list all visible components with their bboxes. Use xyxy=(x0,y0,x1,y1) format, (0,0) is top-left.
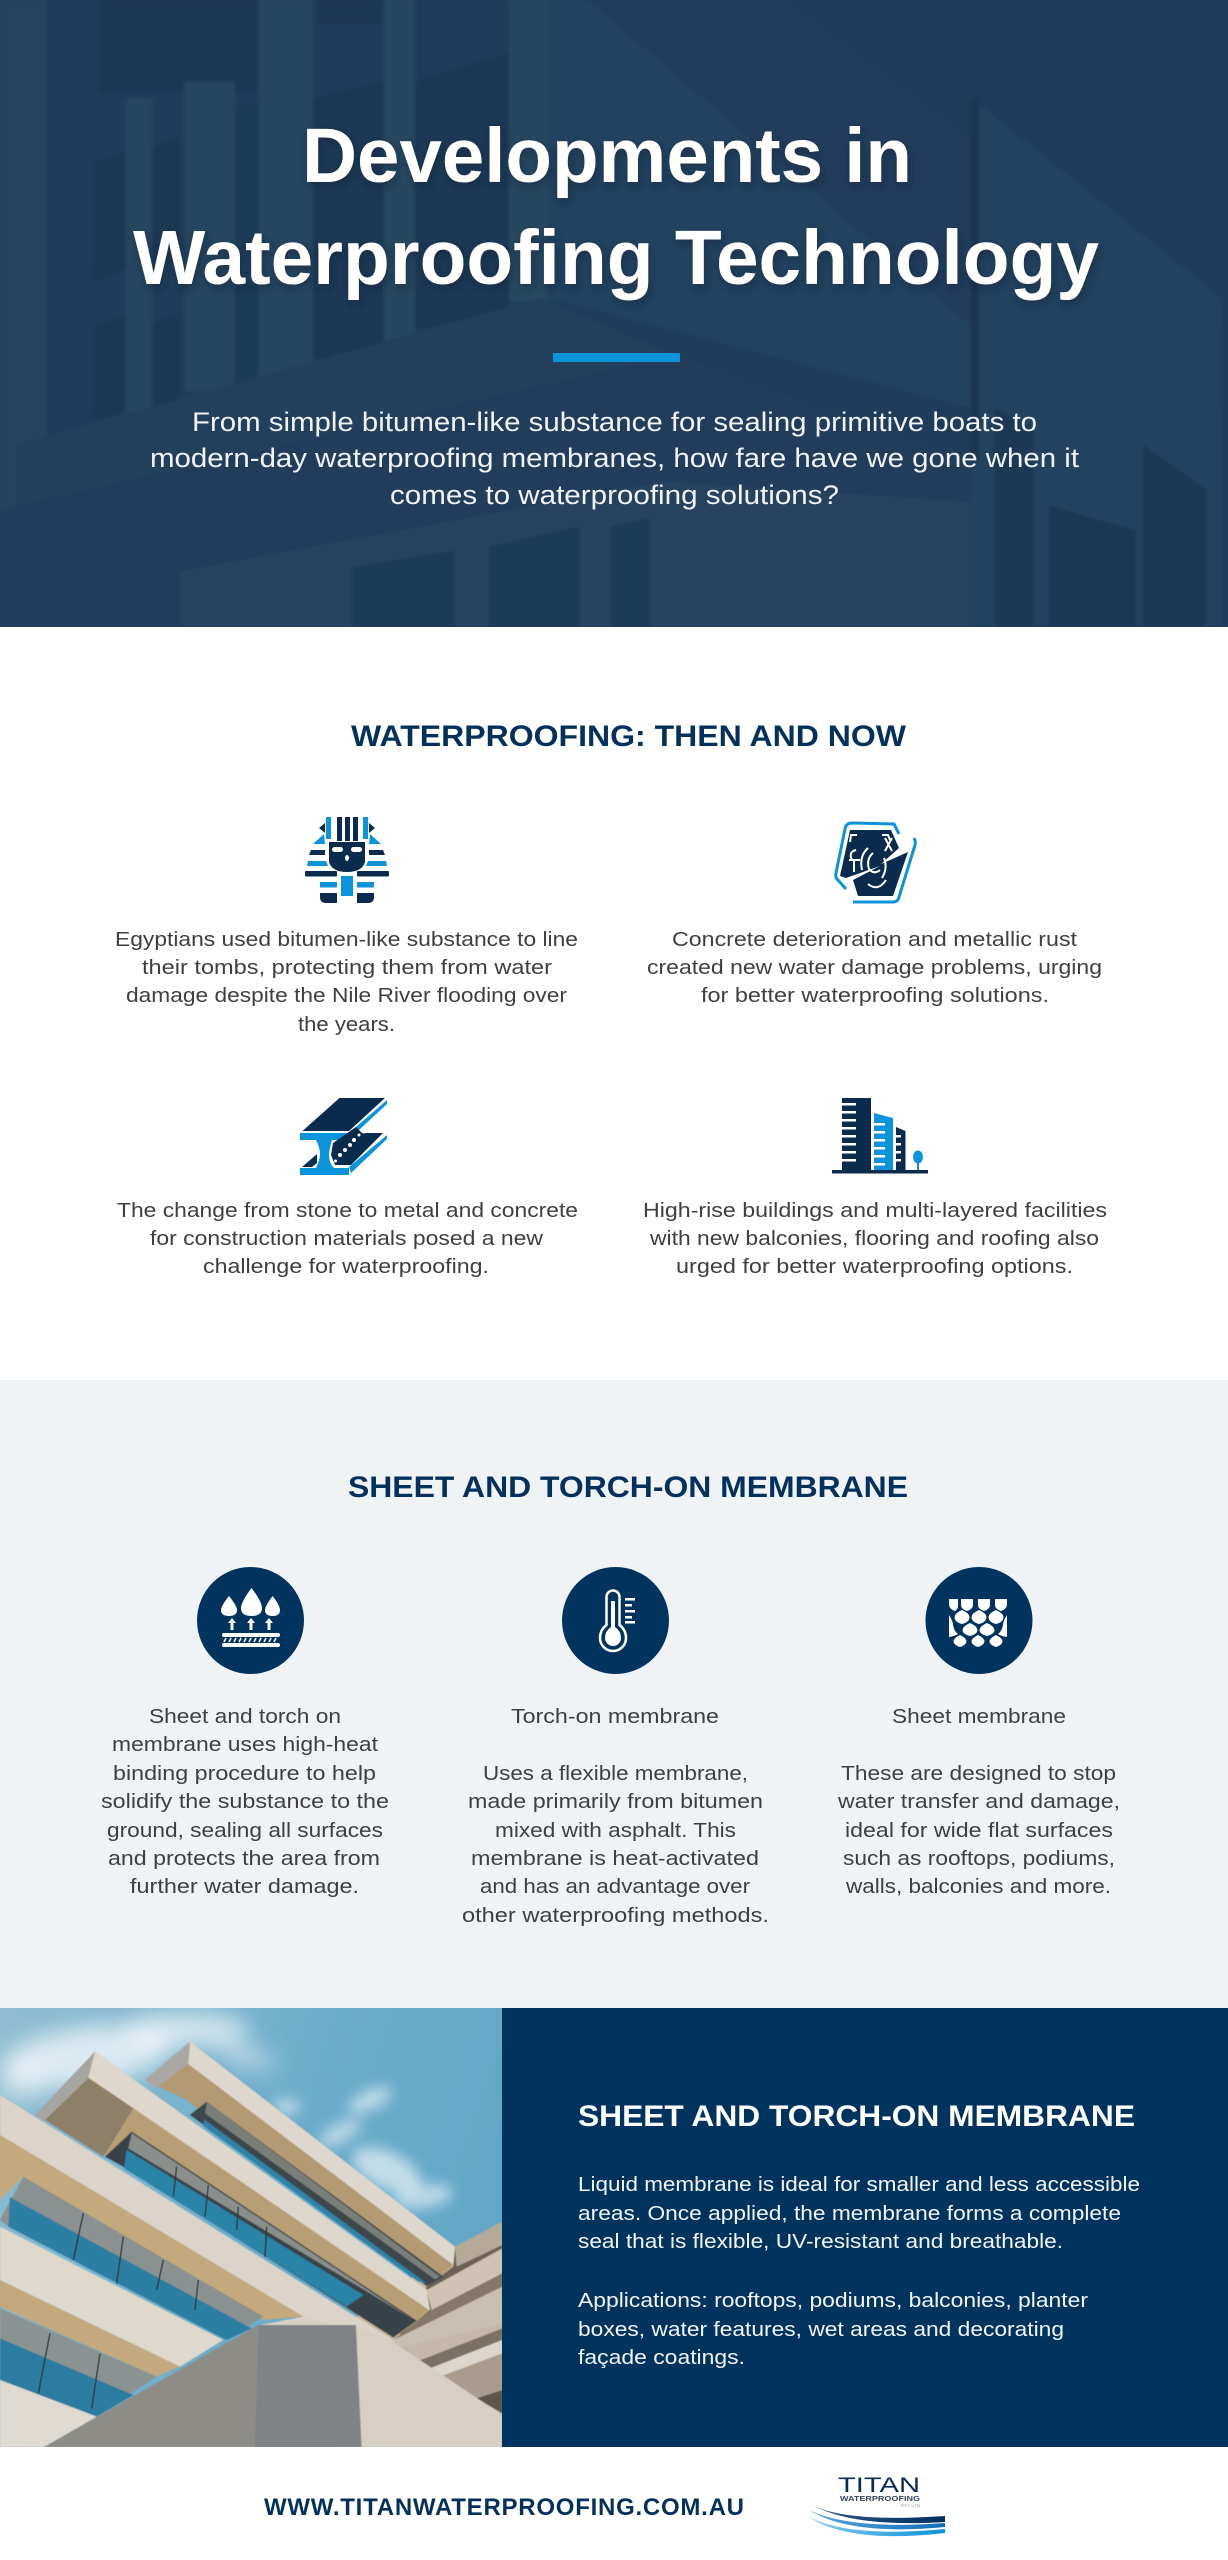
text: sheet and torch on: Sheet and torch on xyxy=(149,1705,341,1728)
text: applications xyxy=(578,2289,1088,2369)
icon: pharaoh xyxy=(305,817,389,903)
text: torch-on membrane: Uses a flexible membrane, xyxy=(483,1762,748,1785)
text: sheet and torch on: and protects the area from xyxy=(108,1847,380,1870)
heading: panel: SHEET AND TORCH-ON MEMBRANE xyxy=(578,2100,1135,2133)
subtitle xyxy=(150,407,1080,510)
text: concrete deterioration: created new water damage problems, urging xyxy=(647,956,1102,979)
fourth wing xyxy=(0,2227,223,2367)
title: Waterproofing Technology xyxy=(133,215,1099,301)
text: concrete deterioration: for better waterproofing solutions. xyxy=(701,984,1049,1007)
text: torch-on membrane: other waterproofing methods. xyxy=(462,1904,769,1927)
text: high-rise xyxy=(643,1199,1107,1278)
text: torch-on membrane xyxy=(462,1705,769,1927)
text: sheet membrane: Sheet membrane xyxy=(892,1705,1066,1728)
logo: titan waterproofing: TITAN xyxy=(838,2474,920,2497)
text: stone to metal: for construction materials posed a new xyxy=(150,1227,543,1250)
text: stone to metal: The change from stone to metal and concrete xyxy=(117,1199,578,1222)
second wing xyxy=(35,2052,430,2338)
text: sheet and torch on: ground, sealing all surfaces xyxy=(107,1819,383,1842)
icon: thermometer xyxy=(562,1567,669,1674)
text: sheet membrane: such as rooftops, podiums, xyxy=(843,1847,1115,1870)
text: torch-on membrane: mixed with asphalt. This xyxy=(495,1819,736,1842)
accent bar xyxy=(553,353,680,362)
text: torch-on membrane: Torch-on membrane xyxy=(511,1705,719,1728)
text: torch-on membrane: membrane is heat-activated xyxy=(471,1847,759,1870)
text: egyptians xyxy=(115,928,578,1036)
text: applications: façade coatings. xyxy=(578,2346,745,2369)
text: sheet and torch on: further water damage. xyxy=(130,1875,359,1898)
icon: steel i-beam xyxy=(300,1098,387,1175)
panel: hero header xyxy=(0,0,1228,627)
text: liquid membrane description: areas. Once applied, the membrane forms a complete xyxy=(578,2202,1121,2225)
hero background: building facade xyxy=(2,1,977,458)
logo: titan waterproofing xyxy=(809,2474,945,2536)
text: high-rise: with new balconies, flooring and roofing also xyxy=(649,1227,1099,1250)
text: sheet membrane: These are designed to stop xyxy=(841,1762,1116,1785)
text: applications: boxes, water features, wet areas and decorating xyxy=(578,2318,1064,2341)
text: sheet and torch on: membrane uses high-heat xyxy=(112,1733,378,1756)
icon: water drops rising from membrane xyxy=(197,1567,304,1674)
text: liquid membrane description: Liquid membrane is ideal for smaller and less accessible xyxy=(578,2173,1140,2196)
heading: sheet and torch-on membrane: SHEET AND TORCH-ON MEMBRANE xyxy=(348,1471,908,1504)
text: high-rise: urged for better waterproofing options. xyxy=(676,1255,1073,1278)
text: torch-on membrane: and has an advantage over xyxy=(480,1875,750,1898)
text: applications: Applications: rooftops, podiums, balconies, planter xyxy=(578,2289,1088,2312)
text: stone to metal xyxy=(117,1199,578,1278)
text: high-rise: High-rise buildings and multi-layered facilities xyxy=(643,1199,1107,1222)
text: concrete deterioration xyxy=(647,928,1102,1007)
subtitle: From simple bitumen-like substance for sealing primitive boats to xyxy=(192,407,1037,437)
text: egyptians: their tombs, protecting them from water xyxy=(142,956,552,979)
logo: titan waterproofing: PTY LTD xyxy=(901,2503,920,2508)
third wing xyxy=(0,2095,393,2350)
text: sheet membrane: ideal for wide flat surfaces xyxy=(845,1819,1113,1842)
far wing xyxy=(145,2042,455,2287)
photo: modern building against sky xyxy=(0,2008,502,2447)
text: egyptians: Egyptians used bitumen-like substance to line xyxy=(115,928,578,951)
text: sheet and torch on: solidify the substance to the xyxy=(101,1790,389,1813)
panel: liquid membrane xyxy=(502,2008,1228,2447)
logo: titan waterproofing: WATERPROOFING xyxy=(840,2494,920,2503)
text: torch-on membrane: made primarily from bitumen xyxy=(468,1790,763,1813)
icon: damaged concrete map xyxy=(836,823,915,902)
heading: then and now: WATERPROOFING: THEN AND NOW xyxy=(351,720,907,753)
text: sheet membrane: water transfer and damage, xyxy=(837,1790,1120,1813)
title xyxy=(133,113,1099,301)
text: concrete deterioration: Concrete deterioration and metallic rust xyxy=(672,928,1077,951)
text: egyptians: damage despite the Nile River flooding over xyxy=(126,984,567,1007)
panel: sheet and torch-on membrane xyxy=(0,1380,1228,2008)
footer xyxy=(264,2474,945,2536)
icon: roof shingles xyxy=(926,1567,1032,1674)
panel: then and now xyxy=(0,627,1228,1380)
website url: WWW.TITANWATERPROOFING.COM.AU xyxy=(264,2494,744,2521)
text: egyptians: the years. xyxy=(298,1013,395,1036)
subtitle: modern-day waterproofing membranes, how fare have we gone when it xyxy=(150,443,1080,473)
subtitle: comes to waterproofing solutions? xyxy=(390,480,839,510)
icon: high-rise buildings xyxy=(832,1098,928,1174)
text: liquid membrane description xyxy=(578,2173,1140,2253)
text: sheet and torch on: binding procedure to help xyxy=(113,1762,376,1785)
text: sheet and torch on xyxy=(101,1705,389,1898)
text: sheet membrane: walls, balconies and more. xyxy=(845,1875,1111,1898)
front block xyxy=(260,2317,395,2343)
text: sheet membrane xyxy=(837,1705,1120,1898)
text: liquid membrane description: seal that is flexible, UV-resistant and breathable. xyxy=(578,2230,1063,2253)
text: stone to metal: challenge for waterproofing. xyxy=(203,1255,489,1278)
title: Developments in xyxy=(302,113,912,199)
